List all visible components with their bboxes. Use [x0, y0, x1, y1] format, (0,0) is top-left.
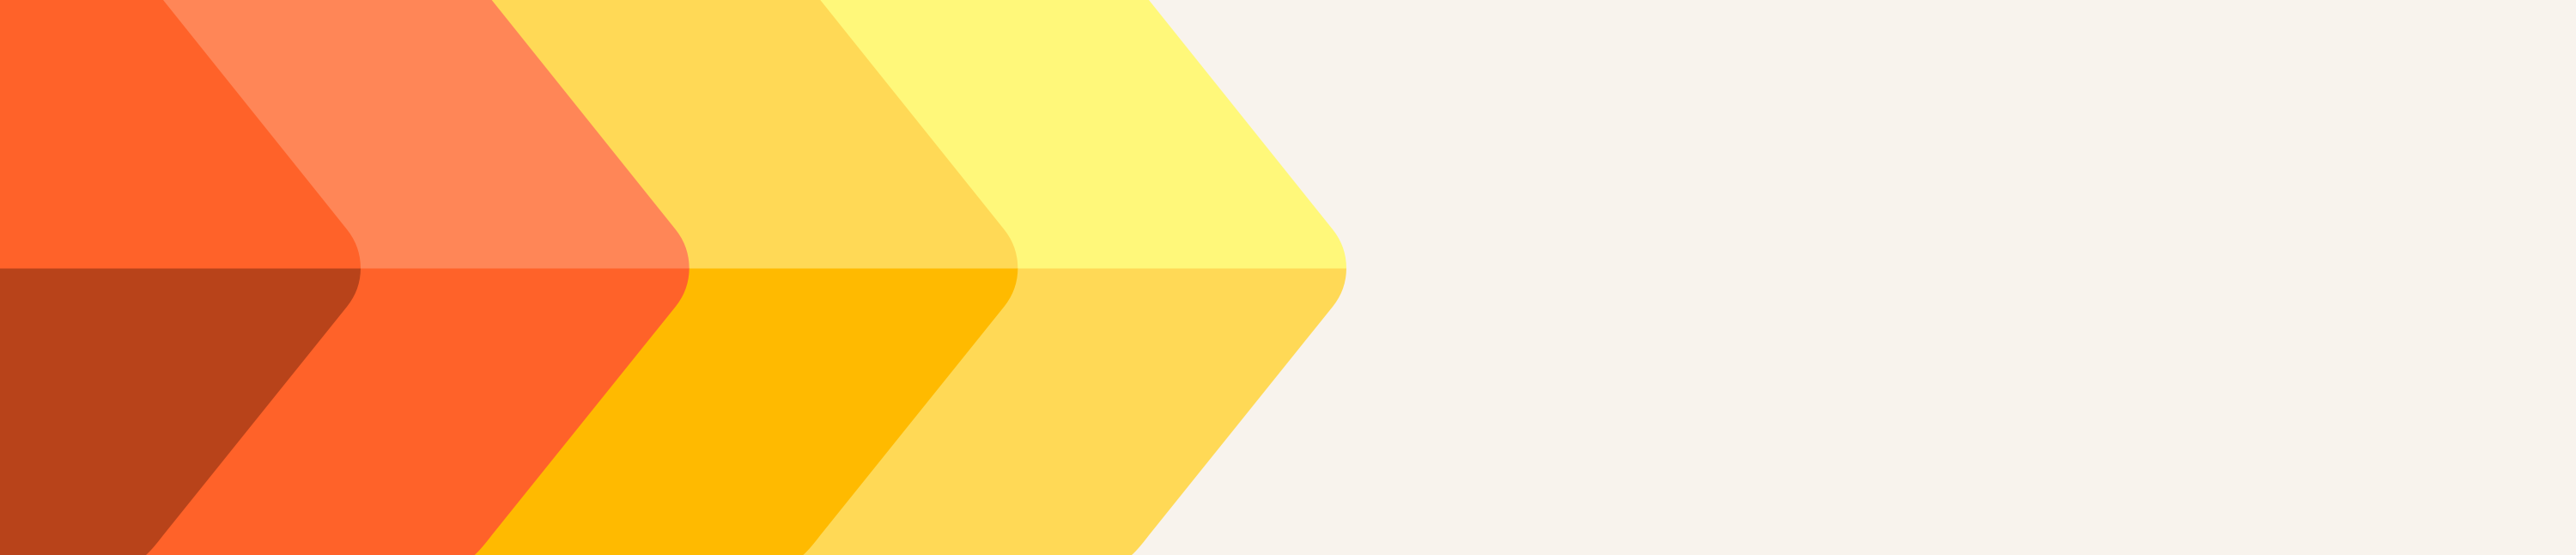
chevron 3: amber [0, 0, 1018, 555]
chevron 2: orange [0, 0, 690, 555]
chevron 4: pale yellow [0, 0, 1346, 555]
chevron 1: deep orange [0, 0, 361, 555]
